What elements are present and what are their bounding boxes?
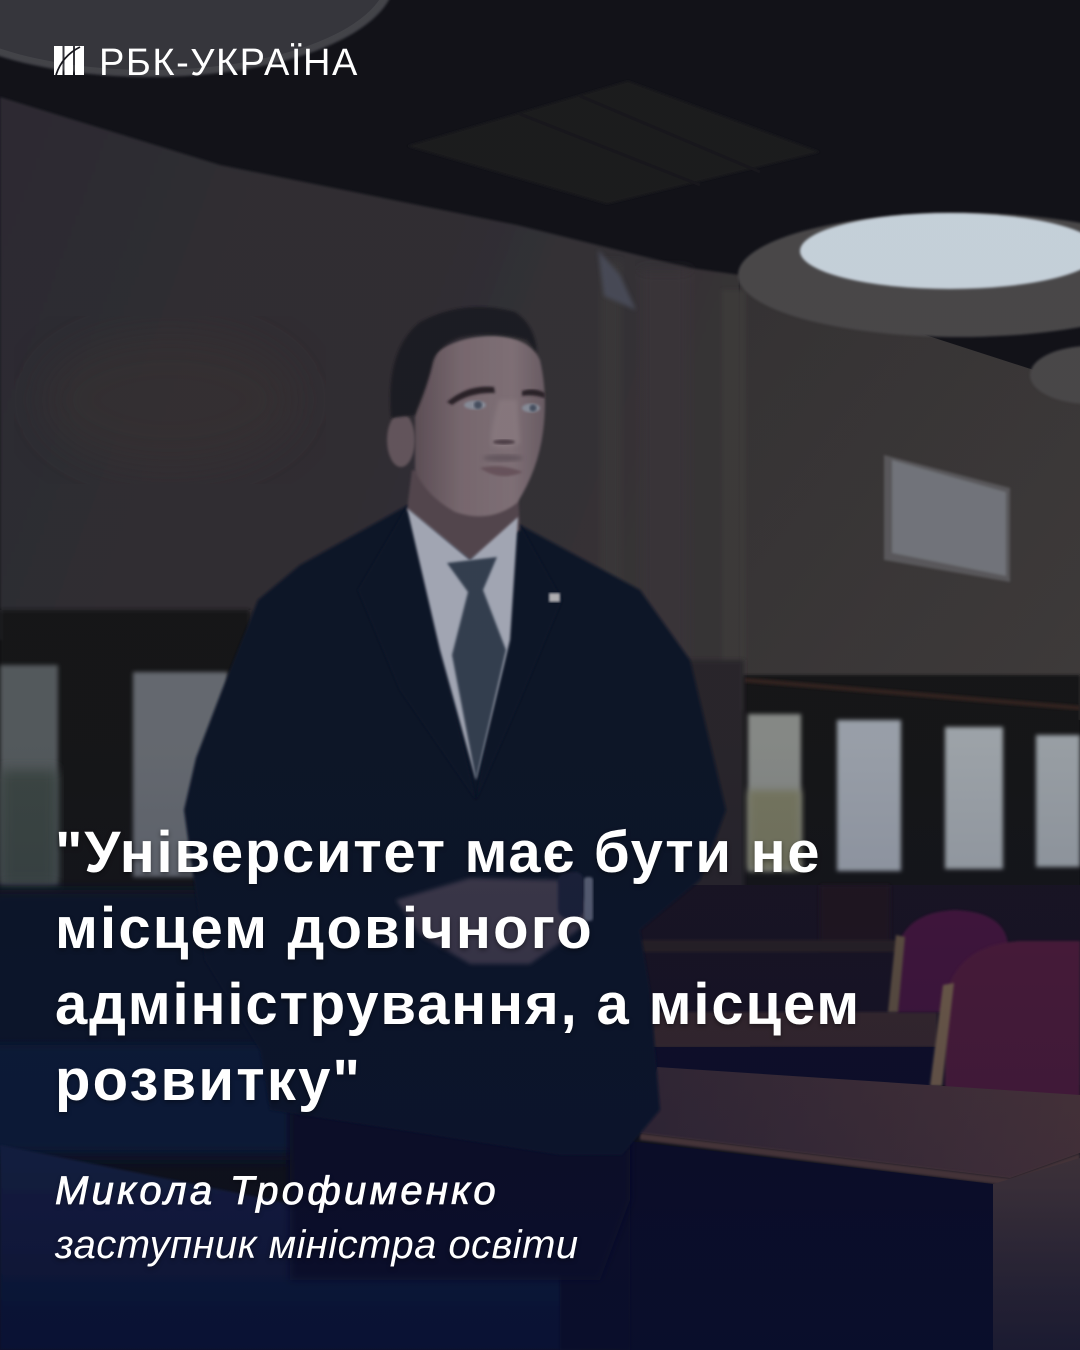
quote headline: розвитку" [55, 1048, 362, 1113]
attribution: speaker name: Микола Трофименко [55, 1169, 499, 1213]
brows, eyes, nose, mouth [447, 387, 495, 405]
pin [549, 593, 560, 602]
man in dark suit [184, 307, 726, 1350]
red chairs [897, 910, 1008, 1012]
watch and cuff [558, 872, 584, 918]
ceiling [0, 0, 1080, 400]
tie [447, 557, 506, 780]
face [415, 336, 545, 516]
foreground desk [0, 1045, 290, 1150]
quote headline [55, 820, 861, 1114]
hands [396, 878, 590, 964]
logo: РБК-Україна [54, 42, 359, 84]
concrete walls [0, 97, 1080, 720]
ceiling light rings [738, 213, 1080, 404]
quote headline: адміністрування, а місцем [55, 972, 861, 1037]
left window [0, 610, 290, 1160]
attribution: speaker role: заступник міністра освіти [55, 1223, 579, 1267]
right windows [640, 660, 1080, 890]
icon: РБК mark [54, 46, 84, 75]
logo wordmark: РБК-УКРАЇНА [99, 42, 359, 84]
ear [387, 413, 415, 467]
shirt [407, 508, 518, 780]
main table [640, 1067, 1080, 1178]
neck [407, 470, 520, 560]
air vent [884, 455, 1010, 582]
trousers [560, 1150, 630, 1350]
quote headline: "Університет має бути не [55, 820, 821, 885]
lecture hall furniture [0, 885, 1080, 1350]
quote headline: місцем довічного [55, 896, 594, 961]
jacket [184, 505, 726, 1155]
lapels [358, 505, 476, 800]
hair [390, 307, 537, 418]
